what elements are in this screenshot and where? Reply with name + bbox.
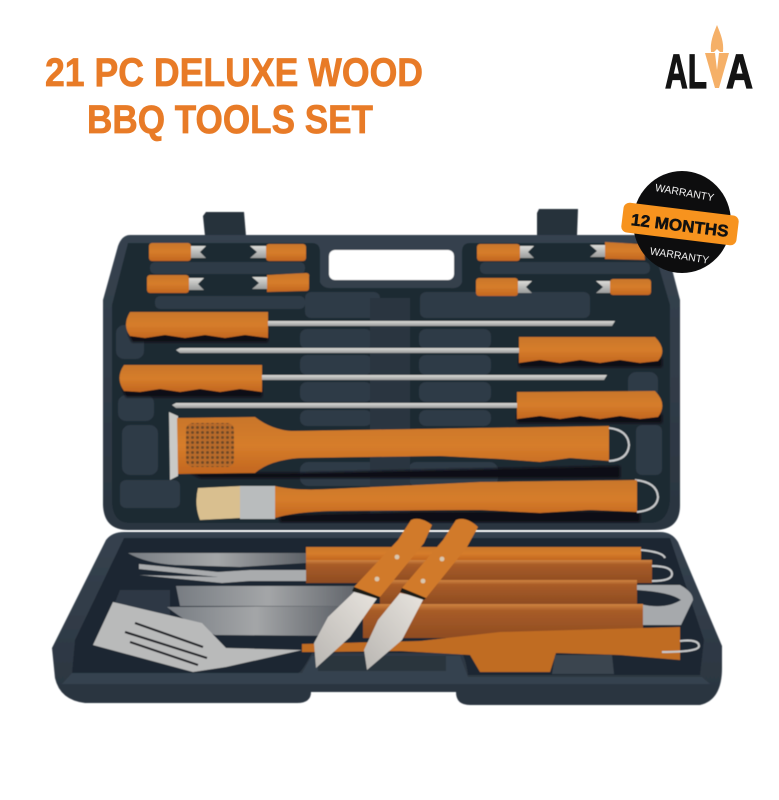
long skewers (4 pieces) — [120, 312, 662, 423]
spatula handle — [302, 627, 680, 672]
tool: fork — [139, 560, 672, 583]
case: lower tray — [52, 532, 722, 705]
warranty badge — [621, 171, 739, 273]
logo: ALVA — [665, 25, 753, 99]
basting brush — [196, 480, 658, 522]
tool: tongs — [167, 580, 693, 638]
title — [45, 51, 423, 142]
title: 21 PC DELUXE WOOD — [45, 51, 423, 95]
brush handle loop — [609, 428, 629, 461]
rivets — [421, 557, 444, 583]
tray ribs — [116, 262, 662, 518]
basting handle loop — [635, 480, 658, 512]
scraper plate — [169, 412, 178, 480]
tongs spring — [637, 585, 693, 625]
logo: ALVA: A — [726, 46, 753, 99]
tool: carving knife — [128, 547, 665, 567]
small skewer forks (8 pieces) — [147, 242, 651, 296]
lid tray recess — [112, 243, 670, 523]
warranty top text: WARRANTY — [654, 182, 715, 204]
tray floor — [72, 538, 704, 675]
title: BBQ TOOLS SET — [87, 98, 373, 142]
grill cleaning brush — [169, 412, 629, 480]
carrying handle opening — [329, 250, 454, 280]
tool: spatula — [93, 602, 699, 674]
tool: paring knife left — [314, 519, 432, 668]
case: upper lid clips — [203, 209, 578, 236]
logo: ALVA: AL — [665, 46, 707, 99]
spatula handle loop — [662, 641, 699, 652]
case: upper lid — [103, 235, 680, 530]
warranty bottom text: WARRANTY — [649, 245, 710, 267]
knife handle loop — [641, 550, 665, 558]
brush body — [177, 417, 609, 474]
bristles — [196, 486, 241, 520]
wire bristles — [186, 423, 234, 467]
spatula slots — [125, 623, 207, 665]
handle — [275, 480, 637, 518]
fork handle loop — [652, 566, 672, 581]
ferrule — [240, 486, 275, 519]
rivets — [375, 555, 399, 581]
tool: paring knife right — [364, 519, 478, 670]
skewer shadows — [122, 333, 662, 423]
months band: 12 MONTHS — [630, 211, 729, 241]
product photo: open tool case — [52, 209, 722, 705]
